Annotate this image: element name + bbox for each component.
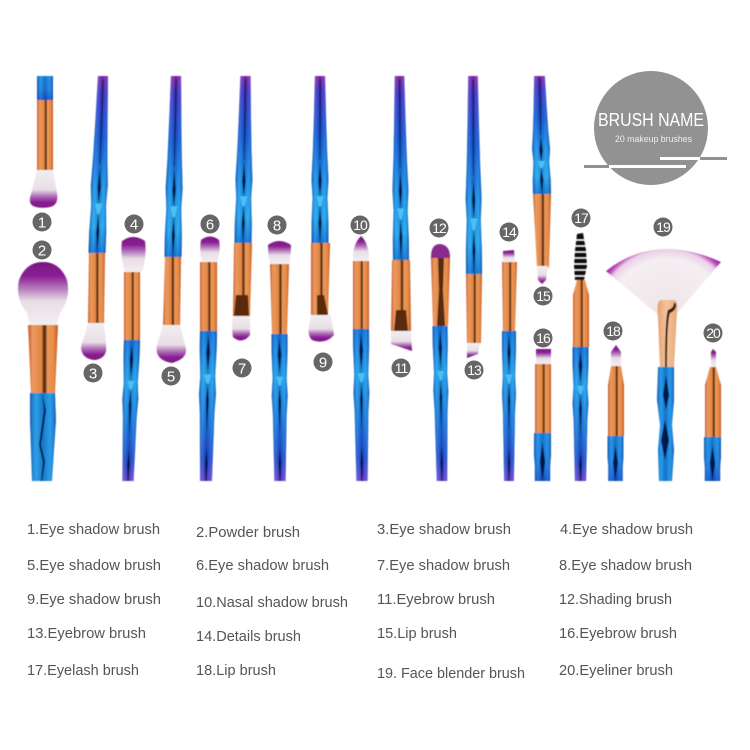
legend: brush names: 8.Eye shadow brush xyxy=(559,558,692,574)
number 4 xyxy=(124,214,144,234)
number 18 xyxy=(604,322,622,340)
number 10 xyxy=(350,216,370,234)
legend: brush names xyxy=(27,522,693,682)
brushes group xyxy=(18,76,721,481)
number 12: 12 xyxy=(432,220,447,236)
legend: brush names: 11.Eyebrow brush xyxy=(377,592,495,608)
number 5: 5 xyxy=(167,368,175,386)
number 19: 19 xyxy=(656,219,671,235)
brush 12 xyxy=(431,244,450,481)
brush 3 xyxy=(81,76,112,360)
brush 1 xyxy=(30,76,57,208)
number 17: 17 xyxy=(574,210,589,226)
number 10: 10 xyxy=(353,217,368,233)
brush 11 xyxy=(391,76,412,351)
brush 16 xyxy=(534,349,551,481)
number 3 xyxy=(84,364,102,382)
number 11: 11 xyxy=(395,360,408,376)
number 4: 4 xyxy=(130,216,138,234)
number 7 xyxy=(232,358,252,378)
brush 20 xyxy=(704,349,721,481)
number 3: 3 xyxy=(89,366,97,382)
brush 5 xyxy=(157,76,186,363)
number 6 xyxy=(200,214,220,234)
number 15 xyxy=(534,286,552,306)
brush 19 xyxy=(606,249,721,481)
number 13 xyxy=(464,360,484,380)
number 20 xyxy=(704,324,722,342)
number 8: 8 xyxy=(273,218,281,234)
brush 13 xyxy=(465,76,482,358)
brush 9 xyxy=(308,76,334,342)
number 7: 7 xyxy=(238,360,246,378)
legend: brush names: 18.Lip brush xyxy=(196,663,276,679)
legend: brush names: 4.Eye shadow brush xyxy=(560,522,693,538)
legend: brush names: 10.Nasal shadow brush xyxy=(196,595,348,611)
brush 8 xyxy=(268,241,291,481)
legend: brush names: 12.Shading brush xyxy=(559,592,672,608)
brush 10 xyxy=(353,236,370,481)
legend: brush names: 19. Face blender brush xyxy=(377,666,525,682)
legend: brush names: 15.Lip brush xyxy=(377,626,457,642)
legend: brush names: 20.Eyeliner brush xyxy=(559,663,673,679)
number 18: 18 xyxy=(606,323,621,339)
legend: brush names: 13.Eyebrow brush xyxy=(27,626,146,642)
brush 6 xyxy=(198,236,220,481)
legend: brush names: 5.Eye shadow brush xyxy=(27,558,161,574)
number 16: 16 xyxy=(536,330,551,346)
legend: brush names: 7.Eye shadow brush xyxy=(377,558,510,574)
number 19 xyxy=(654,218,672,236)
number 17 xyxy=(572,208,590,228)
legend: brush names: 6.Eye shadow brush xyxy=(196,558,329,574)
number 14 xyxy=(500,222,518,242)
legend: brush names: 1.Eye shadow brush xyxy=(27,522,160,538)
brush 17 xyxy=(572,233,590,481)
legend: brush names: 16.Eyebrow brush xyxy=(559,626,677,642)
brush 14 xyxy=(502,250,517,481)
number 5 xyxy=(162,366,180,386)
number 1: 1 xyxy=(38,214,46,232)
brush 4 xyxy=(120,237,146,481)
number 20: 20 xyxy=(706,325,721,341)
brush 2 xyxy=(18,262,68,481)
number 2 xyxy=(32,240,52,260)
number 12 xyxy=(430,218,448,238)
number 16 xyxy=(534,328,552,348)
number 9: 9 xyxy=(319,354,327,372)
number 6: 6 xyxy=(206,216,214,234)
brush 15 xyxy=(530,76,551,284)
number 11 xyxy=(392,358,410,378)
number 13: 13 xyxy=(467,362,482,378)
circle badge: brush name xyxy=(584,71,727,185)
number 2: 2 xyxy=(38,242,46,260)
legend: brush names: 14.Details brush xyxy=(196,629,301,645)
legend: brush names: 17.Eyelash brush xyxy=(27,663,139,679)
brush 18 xyxy=(608,345,624,481)
circle badge: brush name: BRUSH NAME xyxy=(598,110,704,130)
number 1 xyxy=(32,212,52,232)
legend: brush names: 2.Powder brush xyxy=(196,525,300,541)
number 15: 15 xyxy=(536,288,551,304)
brush 7 xyxy=(232,76,254,341)
legend: brush names: 3.Eye shadow brush xyxy=(377,522,511,538)
number 9 xyxy=(314,352,332,372)
legend: brush names: 9.Eye shadow brush xyxy=(27,592,161,608)
number 14: 14 xyxy=(502,224,517,240)
circle badge: brush name: 20 makeup brushes xyxy=(615,134,692,145)
number 8 xyxy=(268,216,286,234)
